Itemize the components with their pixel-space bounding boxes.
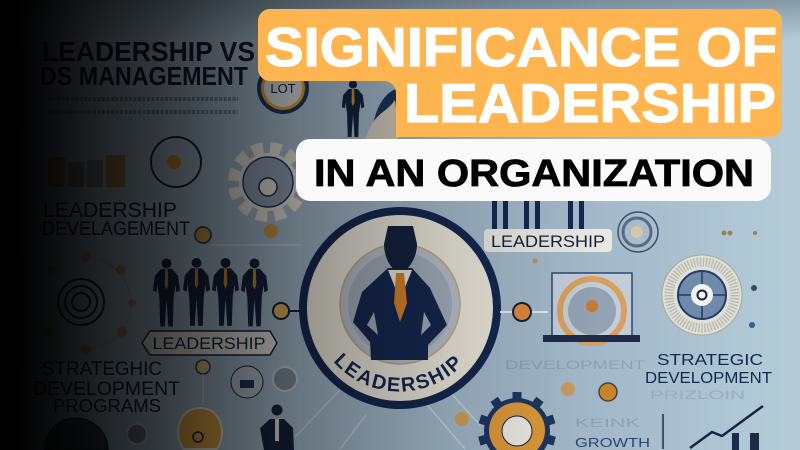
icon: monitor	[543, 273, 640, 343]
label: strategic development: STRATEGIC	[657, 352, 763, 369]
icon: lightbulb	[178, 408, 222, 449]
title banner	[258, 9, 782, 137]
faded labels: PRIZLOIN	[650, 388, 745, 402]
heading: leadership vs management	[40, 36, 255, 91]
central leadership emblem	[299, 207, 501, 409]
faded dots	[455, 382, 617, 426]
label pill: leadership: LEADERSHIP	[152, 334, 266, 353]
blurred caption lines	[48, 99, 238, 112]
heading: strategic development programs: PROGRAMS	[53, 396, 161, 416]
icon: target dial	[662, 255, 742, 335]
title text: LEADERSHIP	[404, 72, 776, 134]
heading: leadership vs management: DS MANAGEMENT	[40, 61, 248, 91]
heading: strategic development programs	[33, 359, 180, 416]
heading: leadership development	[42, 199, 190, 240]
small standing figure	[260, 404, 294, 450]
chart: orange bars	[48, 155, 125, 187]
icon: partial circle bottom left	[44, 418, 108, 450]
label: strategic development: DEVELOPMENT	[645, 370, 772, 387]
growth chart	[663, 406, 763, 450]
heading: strategic development programs: STRATEGHIC	[42, 359, 162, 380]
badge: LOT: LOT	[270, 81, 296, 96]
title text: SIGNIFICANCE OF	[265, 16, 777, 78]
node	[500, 303, 548, 321]
small icons	[127, 360, 297, 444]
heading: leadership development: DEVELAGEMENT	[42, 219, 190, 240]
label pill: leadership right: LEADERSHIP	[491, 232, 605, 251]
subtitle banner: IN AN ORGANIZATION	[314, 153, 754, 195]
label: growth: GROWTH	[575, 435, 650, 450]
faded labels	[505, 358, 745, 430]
central leadership emblem: LEADERSHIP	[334, 352, 458, 392]
icon: orange gear	[478, 392, 556, 450]
label: strategic development	[645, 352, 772, 387]
title text	[265, 16, 777, 134]
icon: ring top right	[618, 212, 658, 252]
heading: strategic development programs: DEVELOPMENT	[33, 379, 180, 400]
icon: gear	[234, 148, 302, 216]
top figures legs	[492, 200, 584, 229]
heading: leadership vs management: LEADERSHIP VS	[42, 36, 255, 67]
group of four leaders	[153, 258, 268, 326]
label pill: leadership right	[484, 229, 612, 252]
badge: LOT	[257, 62, 309, 114]
connector lines	[295, 390, 480, 449]
scattered small marks	[532, 230, 757, 328]
figures behind title	[342, 80, 400, 140]
node dots	[195, 224, 300, 319]
faded labels: DEVELOPMENT	[505, 358, 646, 372]
curved emblem text	[326, 352, 470, 391]
label pill: leadership	[142, 331, 277, 355]
heading: leadership development: LEADERSHIP	[43, 199, 177, 222]
icon: spiral radar	[39, 252, 136, 354]
icon: ring badge	[151, 137, 201, 187]
faded labels: KEINK	[575, 416, 640, 430]
leader silhouette	[353, 226, 447, 360]
subtitle banner	[296, 139, 771, 201]
